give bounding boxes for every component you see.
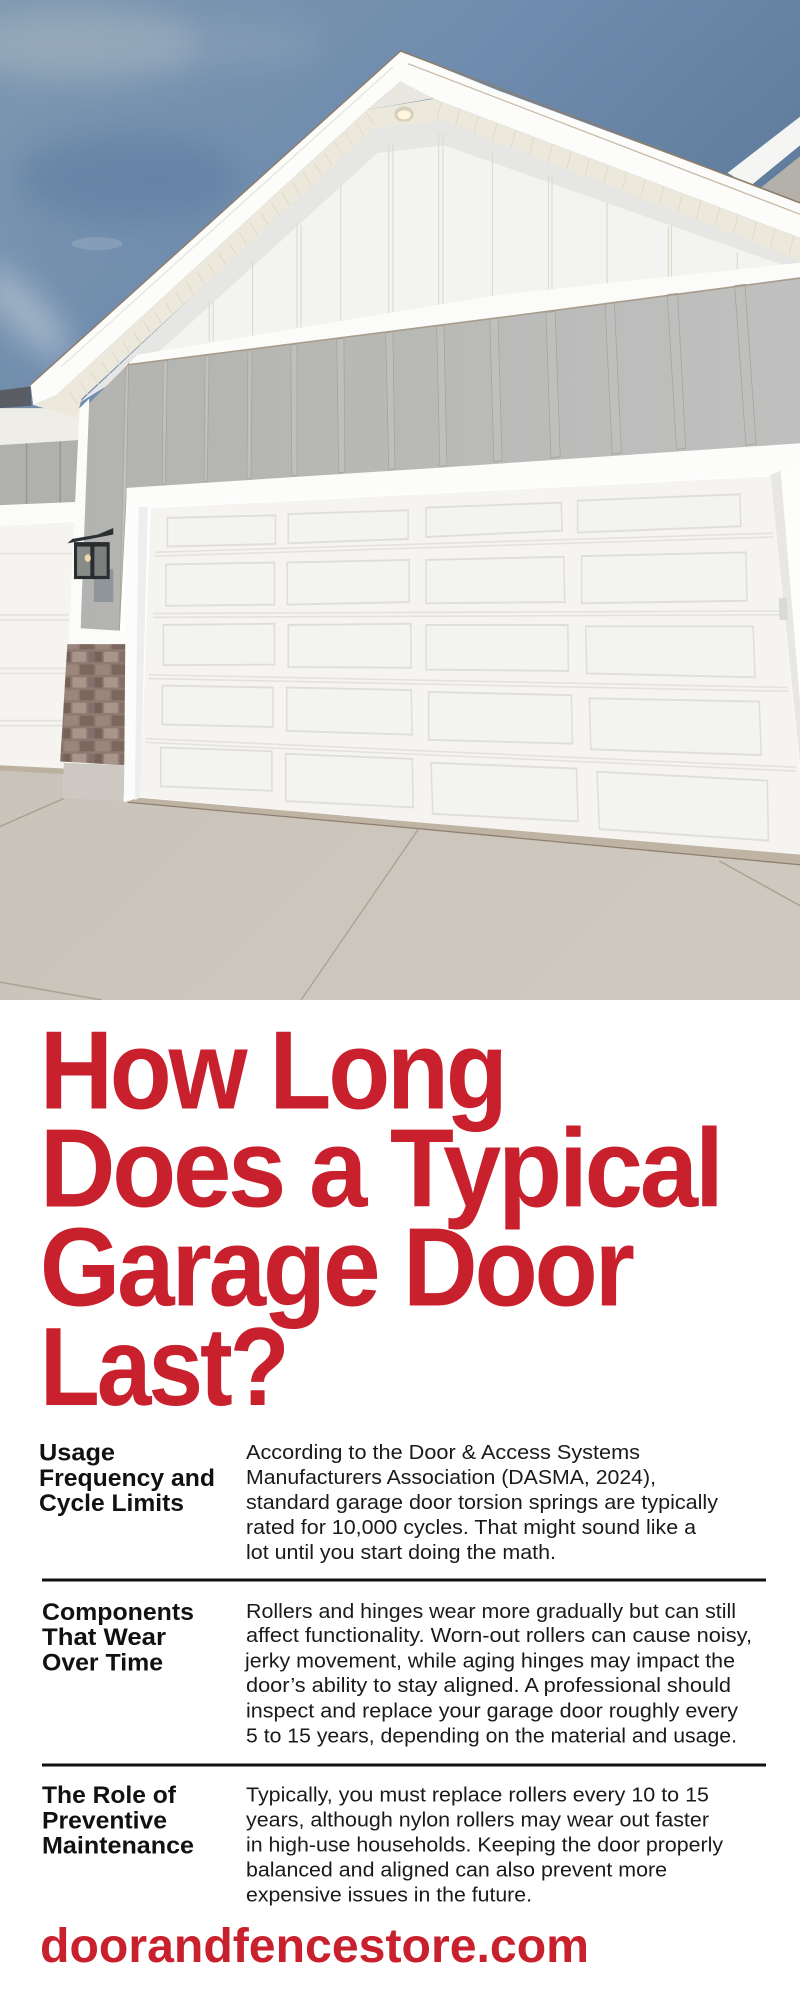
- text block: components: 5 to 15 years, depending on the material and usage.: [246, 1726, 737, 1748]
- text block: components: [244, 1601, 752, 1748]
- heading: the role of preventive maintenance: [42, 1782, 194, 1860]
- garage door with raised panels: [140, 476, 800, 855]
- text block: usage frequency: standard garage door torsion springs are typically: [246, 1492, 718, 1514]
- heading: usage frequency and cycle limits: [39, 1440, 215, 1517]
- text block: preventive maintenance: [246, 1784, 723, 1907]
- wall lantern: [67, 528, 113, 602]
- photo: white garage door and gable house under blue sky: [0, 0, 800, 1000]
- text block: usage frequency: rated for 10,000 cycles. That might sound like a: [246, 1517, 697, 1539]
- concrete driveway: [0, 765, 800, 1000]
- text block: components: inspect and replace your garage door roughly every: [246, 1700, 738, 1722]
- footer: website address: doorandfencestore.com: [40, 1920, 589, 1973]
- text block: components: jerky movement, while aging hinges may impact the: [244, 1650, 735, 1672]
- text block: preventive maintenance: years, although nylon rollers may wear out faster: [246, 1810, 709, 1832]
- left neighbouring house section: [0, 386, 82, 768]
- text block: preventive maintenance: balanced and aligned can also prevent more: [246, 1860, 667, 1882]
- heading: components that wear over time: That Wear: [42, 1624, 166, 1651]
- gray lower board-and-batten wall: [81, 278, 800, 631]
- heading: the role of preventive maintenance: Preventive: [42, 1808, 167, 1834]
- title: How Long Does a Typical Garage Door Last?: [40, 1007, 721, 1420]
- roof fascia and soffit: [31, 51, 800, 418]
- heading: components that wear over time: [42, 1599, 194, 1676]
- title: How Long Does a Typical Garage Door Last?: How Long: [40, 1007, 505, 1132]
- content sections and footer: [39, 1440, 766, 1973]
- heading: usage frequency and cycle limits: Usage: [39, 1440, 115, 1466]
- text block: preventive maintenance: Typically, you must replace rollers every 10 to 15: [246, 1784, 709, 1806]
- heading: usage frequency and cycle limits: Frequency and: [39, 1465, 215, 1492]
- heading: the role of preventive maintenance: Maintenance: [42, 1833, 194, 1860]
- white upper board-and-batten wall: [79, 121, 800, 403]
- garage door frame: [124, 443, 800, 855]
- heading: components that wear over time: Over Time: [42, 1650, 163, 1676]
- title: How Long Does a Typical Garage Door Last?: Does a Typical: [40, 1106, 721, 1231]
- text block: usage frequency: lot until you start doing the math.: [246, 1542, 556, 1564]
- white corner pilaster: [68, 399, 130, 644]
- text block: usage frequency: Manufacturers Association (DASMA, 2024),: [246, 1467, 656, 1489]
- text block: usage frequency: According to the Door & Access Systems: [246, 1442, 640, 1464]
- brick column and concrete base: [60, 644, 130, 801]
- text block: preventive maintenance: in high-use households. Keeping the door properly: [246, 1834, 723, 1856]
- heading: components that wear over time: Components: [42, 1599, 194, 1626]
- text block: preventive maintenance: expensive issues in the future.: [246, 1885, 532, 1907]
- right neighbouring gable: [728, 117, 800, 210]
- sky with wispy clouds: [0, 0, 800, 446]
- text block: components: door’s ability to stay aligned. A professional should: [246, 1675, 731, 1697]
- text block: components: affect functionality. Worn-out rollers can cause noisy,: [246, 1625, 752, 1647]
- heading: usage frequency and cycle limits: Cycle Limits: [39, 1490, 184, 1517]
- title: How Long Does a Typical Garage Door Last?: Garage Door: [40, 1204, 634, 1330]
- text block: components: Rollers and hinges wear more gradually but can still: [246, 1601, 736, 1623]
- heading: the role of preventive maintenance: The Role of: [42, 1782, 177, 1809]
- text block: usage frequency: [246, 1442, 718, 1564]
